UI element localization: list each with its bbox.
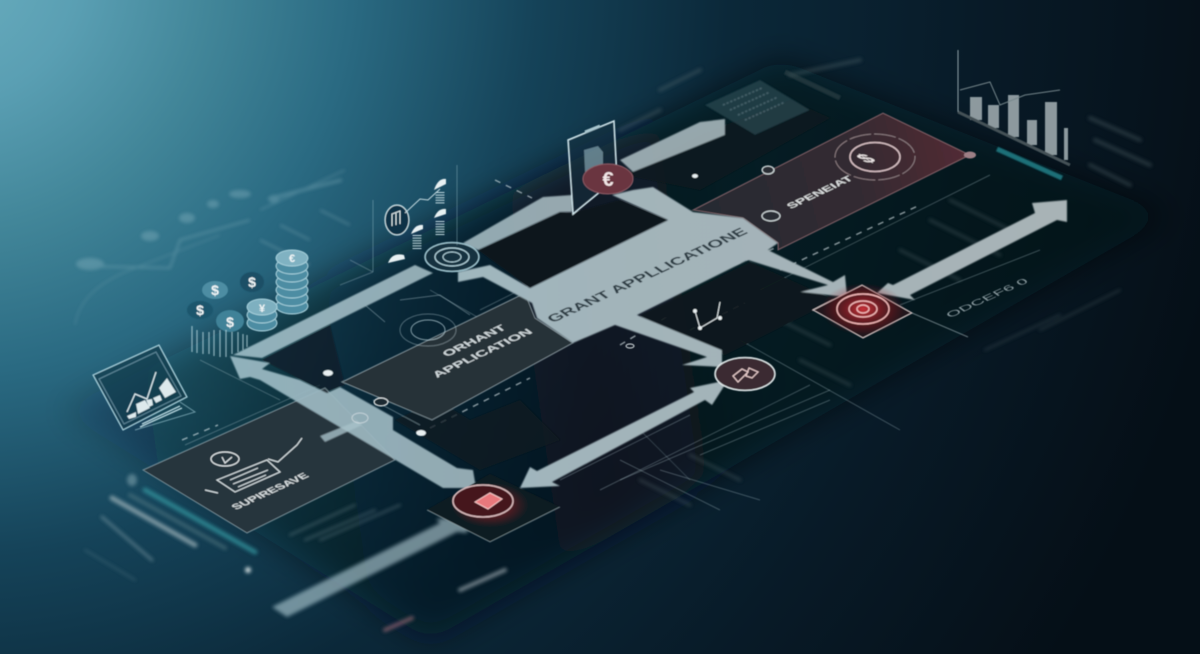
panel: grant application (left) bbox=[342, 293, 573, 420]
arrow: mid double headed bbox=[520, 380, 728, 488]
node: red target bbox=[813, 283, 968, 338]
icon: coin stacks: € bbox=[289, 253, 295, 265]
arrow: up to branch left bbox=[233, 265, 433, 358]
circuit icon above panel bbox=[365, 295, 470, 425]
arrow: diagonal to bottom node bbox=[230, 356, 476, 488]
bar chart, top right bbox=[958, 50, 1070, 178]
cloud data icons bbox=[388, 179, 446, 263]
flow arrows bbox=[230, 119, 1067, 617]
icon: top document tile bbox=[705, 72, 840, 135]
node: spiral circle on branch bbox=[425, 242, 479, 272]
panel heading: ORHANT bbox=[439, 323, 510, 359]
node: bottom red circle bbox=[427, 474, 560, 542]
dark tile behind central flow bbox=[478, 200, 668, 288]
icon: coin stacks: $ bbox=[211, 282, 219, 298]
panel heading: SUPIRESAVE bbox=[229, 471, 312, 511]
arrow: from euro node to top document bbox=[620, 119, 725, 172]
faint blurred interface, upper left bbox=[75, 170, 350, 325]
icon: coin stacks: $ bbox=[226, 314, 234, 330]
node on panel edge bbox=[762, 152, 976, 221]
small panel markers bbox=[323, 174, 722, 436]
connector strip bbox=[320, 421, 362, 442]
central arrow label: GRANT APPLLICATIONE bbox=[543, 226, 752, 325]
isometric grid lines and dashes bbox=[185, 175, 1040, 510]
panel heading: APPLICATION bbox=[429, 327, 536, 380]
icon: clipboard with euro node bbox=[568, 121, 633, 214]
icon: dollar circle bbox=[835, 134, 915, 180]
arrow: to clipboard bbox=[463, 195, 572, 250]
icon: coin stacks bbox=[187, 250, 308, 357]
icon: monitor with rising chart bbox=[93, 345, 195, 430]
arrow: bottom inbound bbox=[272, 517, 470, 617]
hatch under coins bbox=[192, 326, 247, 357]
icon: clock bbox=[211, 452, 239, 466]
icon: coin stacks: ¥ bbox=[259, 303, 266, 315]
central arrow: grant application bbox=[458, 187, 847, 367]
node: middle circle bbox=[715, 358, 775, 390]
icon: coin stacks: $ bbox=[248, 274, 256, 290]
icon: coin stacks: $ bbox=[196, 302, 204, 318]
panel heading: SPENEIAT bbox=[784, 174, 856, 211]
icon: document card bbox=[205, 438, 302, 493]
board artwork bbox=[75, 50, 1150, 630]
panel: supiresave bbox=[143, 388, 395, 533]
blurred status bars, bottom left bbox=[85, 474, 505, 630]
panel: spending bbox=[693, 113, 976, 250]
icon: holographic chart panel bbox=[373, 165, 457, 272]
readout text: ODCEF6 0 bbox=[944, 277, 1031, 320]
icon: dollar circle: $ bbox=[852, 152, 881, 166]
dim circuit detail on right of board bbox=[620, 60, 1150, 505]
arrow: double headed right bbox=[877, 200, 1067, 300]
icon: clipboard with euro node: € bbox=[602, 169, 614, 191]
